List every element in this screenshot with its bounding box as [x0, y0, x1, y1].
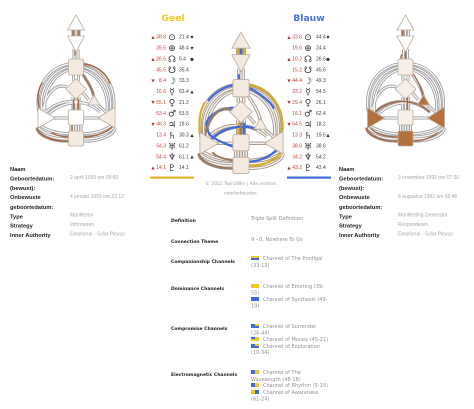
planet table: Blauw: 44.4	[316, 35, 326, 41]
planet table: Geel: ▼	[190, 34, 194, 40]
connection: electromagnetic channels: Channel of Rhythm (5-15)	[263, 383, 328, 389]
planet table: Blauw: ⊙	[304, 33, 312, 43]
profile table: right: Naam	[339, 167, 354, 173]
planet table: Blauw: ♃	[304, 120, 312, 130]
connection: companionship channels: Companionship Channels	[171, 259, 235, 265]
composite centers	[200, 32, 283, 173]
planet table: Blauw: 64.5	[292, 122, 302, 128]
planet table: Geel: ♅	[168, 142, 176, 152]
profile table: left: Inner Authority	[10, 233, 51, 239]
planet table: Geel: 48.4	[179, 46, 189, 52]
planet table: Geel: ☿	[169, 88, 175, 98]
planet table: Blauw: 49.3	[316, 78, 326, 84]
planet table: Blauw: 24.4	[316, 46, 326, 52]
heading: Geel: Geel	[161, 13, 185, 24]
planet table: Geel: ☋	[168, 66, 176, 76]
profile table: left: 4 januari 1993 om 22:12	[70, 194, 124, 200]
planet table: Blauw: ♇	[304, 164, 312, 174]
connection: companionship channels	[171, 256, 323, 269]
planet table: Geel: ☊	[168, 55, 176, 65]
profile table: left: Strategy	[10, 224, 34, 230]
planet table: Blauw: 13.3	[292, 133, 302, 139]
connection: compromise channels: Channel of Surrender	[263, 324, 317, 330]
connection: dominance channels: Dominance Channels	[171, 286, 224, 292]
profile table: left: geboortedatum:	[10, 205, 53, 211]
planet table: Blauw: ▲	[287, 56, 291, 61]
planet table: Geel: ▲	[190, 154, 194, 159]
profile table: left: Emotional - Solar Plexus	[70, 232, 125, 238]
planet table: Geel: ♃	[168, 120, 176, 130]
connection: compromise channels: Compromise Channels	[171, 326, 228, 332]
planet table: Geel: 14.1	[156, 165, 166, 171]
copyright: voorbehouden.	[224, 190, 258, 196]
profile table: left: (bewust):	[10, 186, 35, 192]
connection: dominance channels: 19)	[251, 304, 259, 310]
planet table: Blauw: 29.4	[292, 100, 302, 106]
planet table: Blauw: 18.2	[316, 122, 326, 128]
connection: companionship channels: Channel of The Prodigal	[263, 256, 323, 262]
planet table: Geel: ⊕	[168, 44, 176, 54]
planet table: Geel: ☽	[168, 77, 176, 87]
planet table: Geel: 21.4	[179, 35, 189, 41]
planet table: Geel: ▼	[151, 122, 155, 126]
planet table: Geel: 14.1	[179, 165, 189, 171]
connection: dominance channels: 55)	[251, 290, 259, 296]
connection: compromise channels	[171, 324, 328, 356]
planet table: Blauw: 43.4	[316, 165, 326, 171]
planet table: Blauw: 26.1	[316, 100, 326, 106]
planet table: Blauw: ☿	[305, 88, 311, 98]
planet table: Blauw: 10.2	[292, 56, 302, 62]
planet table: Geel: ▼	[151, 100, 155, 105]
planet table: Geel: 53.5	[179, 111, 189, 117]
profile table: left	[10, 167, 125, 239]
planet table: Geel: ●	[190, 56, 194, 61]
profile table: right: geboortedatum:	[339, 205, 382, 211]
planet table: Blauw: 45.6	[316, 67, 326, 73]
planet table: Geel: 38.8	[156, 35, 166, 41]
connection: dominance channels: Channel of Synthesis (49-	[263, 297, 328, 303]
profile table: left: Naam	[10, 167, 26, 173]
profile table: left: Informeren	[70, 222, 94, 228]
profile table: right: Strategy	[339, 224, 363, 230]
planet table: Geel: ♄	[168, 132, 176, 142]
planet table: Blauw: ☊	[304, 55, 312, 65]
planet table: Blauw: ▼	[287, 100, 291, 105]
profile table: right: Inner Authority	[339, 233, 380, 239]
planet table: Blauw: 54.2	[316, 154, 326, 160]
planet table: Blauw: ♅	[304, 142, 312, 152]
planet table: Blauw: ●	[326, 56, 330, 61]
bodygraph: right person	[366, 15, 444, 146]
planet table: Geel: 21.2	[179, 100, 189, 106]
connection: electromagnetic channels: (61-24)	[251, 396, 269, 402]
composite gold channels	[199, 45, 282, 166]
planet table: Geel: 61.1	[179, 154, 189, 160]
planet table: Geel: ▲	[151, 34, 155, 40]
planet table: Geel: 45.5	[156, 67, 166, 73]
planet table: Blauw: ☋	[304, 66, 312, 76]
planet table: Blauw: 62.4	[316, 111, 326, 117]
left activated channels	[37, 27, 112, 141]
planet table: Blauw: 34.2	[292, 154, 302, 160]
planet table: Geel: ⊙	[168, 33, 176, 43]
planet table: Blauw: 15.2	[292, 67, 302, 73]
profile table: left: Type	[10, 214, 23, 220]
planet table: Blauw: 19.6	[292, 46, 302, 52]
planet table: Blauw: 43.2	[292, 165, 302, 171]
planet table: Geel: 46.3	[156, 122, 166, 128]
profile table: right: Manifesting Generator	[398, 212, 448, 218]
planet table: Geel: ♇	[168, 164, 176, 174]
planet table: Geel: 13.4	[156, 133, 166, 139]
profile table: left: Geboortedatum:	[10, 176, 54, 182]
planet table: Geel: 33.3	[179, 78, 189, 84]
copyright: © 2022 Twin2Win | Alle rechten	[205, 180, 277, 187]
composite brown channels	[199, 109, 241, 168]
planet table: Blauw: ▼	[326, 34, 330, 40]
planet table: Geel: ♆	[168, 153, 176, 163]
planet table: Geel: 54.4	[156, 154, 166, 160]
planet table: Blauw: 44.4	[292, 78, 302, 84]
planet table: Geel: 30.3	[179, 133, 189, 139]
connection: electromagnetic channels: Channel of Awareness	[263, 390, 319, 396]
connection: compromise channels: Channel of Money (45-21)	[263, 337, 328, 343]
connection: electromagnetic channels: Wavelength (48-16)	[251, 377, 301, 383]
planet table: Blauw: 54.5	[316, 89, 326, 95]
planet table: Geel: 53.4	[156, 111, 166, 117]
planet table: Blauw: 38.6	[316, 144, 326, 150]
connection: dominance channels	[171, 284, 328, 310]
planet table: Blauw: ▲	[326, 132, 330, 137]
bodygraph: left person	[37, 15, 115, 146]
planet table: Blauw: ♀	[305, 98, 311, 108]
profile table: right: Geboortedatum:	[339, 176, 383, 182]
planet table: Blauw: ▼	[287, 78, 291, 83]
planet table: Blauw: ♆	[304, 153, 312, 163]
planet table: Geel: ▲	[190, 89, 194, 94]
planet table: Blauw: ▲	[287, 165, 291, 170]
profile table: right: (bewust):	[339, 186, 364, 192]
planet table: Geel: ♂	[168, 110, 176, 120]
planet table: Geel: ▼	[151, 78, 155, 83]
planet table: Geel: 18.6	[179, 122, 189, 128]
connection: electromagnetic channels: Channel of The	[263, 370, 301, 376]
connection: companionship channels: (33-13)	[251, 263, 269, 269]
profile table: right	[339, 167, 459, 239]
connection: definition: Definition	[171, 218, 196, 224]
copyright	[205, 180, 277, 196]
gold underline	[150, 176, 194, 179]
connection: theme: Connection Theme	[171, 239, 218, 245]
profile table: left: 2 april 1993 om 09:50	[70, 175, 119, 181]
profile table: right: Responderen	[398, 222, 428, 228]
planet table: Geel: 61.2	[179, 144, 189, 150]
profile table: left: Onbewuste	[10, 195, 41, 201]
heading: Blauw: Blauw	[293, 13, 325, 24]
connection: electromagnetic channels	[171, 370, 328, 402]
composite blue channels	[207, 45, 276, 162]
planet table: Blauw: ♄	[304, 132, 312, 142]
planet table: Geel: ▲	[151, 56, 155, 61]
planet table: Geel: ▲	[190, 132, 194, 137]
planet table: Blauw: ☽	[304, 77, 312, 87]
planet table: Blauw: 26.6	[316, 56, 326, 62]
connection: definition	[171, 216, 303, 224]
planet table: Geel: 54.3	[156, 144, 166, 150]
planet table: Blauw: ▼	[287, 122, 291, 126]
planet table: Geel: 8.4	[159, 78, 166, 84]
blue underline	[287, 176, 331, 179]
planet table: Geel	[151, 33, 194, 174]
planet table: Geel: 55.1	[156, 100, 166, 106]
planet table: Geel: 63.4	[179, 89, 189, 95]
planet table: Geel: 35.4	[179, 67, 189, 73]
connection: theme	[171, 237, 303, 245]
planet table: Geel: 26.5	[156, 56, 166, 62]
connection: compromise channels: (10-34)	[251, 350, 269, 356]
planet table: Blauw: 16.1	[292, 111, 302, 117]
profile table: right: 5 augustus 1992 om 06:46	[398, 194, 457, 200]
planet table: Geel: 16.6	[156, 89, 166, 95]
planet table: Blauw: ▲	[287, 34, 291, 40]
planet table: Blauw: 19.5	[316, 133, 326, 139]
planet table: Geel: ▲	[151, 165, 155, 170]
connection: theme: 9 - 0, Nowhere To Go	[251, 237, 303, 243]
planet table: Blauw: 33.6	[292, 35, 302, 41]
connection: compromise channels: (26-44)	[251, 330, 269, 336]
right centers	[368, 15, 444, 146]
planet table: Geel: ▼	[190, 45, 194, 50]
planet table: Blauw: ⊕	[304, 44, 312, 54]
connection: definition: Triple Split Definition	[250, 216, 303, 222]
right activated channels	[366, 27, 438, 141]
planet table: Geel: 5.4	[179, 56, 186, 62]
planet table: Blauw	[287, 33, 330, 174]
left centers	[38, 15, 115, 146]
connection: compromise channels: Channel of Exploration	[263, 344, 320, 350]
planet table: Blauw: 33.2	[292, 89, 302, 95]
connection: dominance channels: Channel of Emoting (39-	[263, 284, 324, 290]
planet table: Geel: 39.5	[156, 46, 166, 52]
planet table: Blauw: ♂	[304, 110, 312, 120]
planet table: Blauw: 38.6	[292, 144, 302, 150]
profile table: left: Manifestor	[70, 212, 94, 218]
profile table: right: Onbewuste	[339, 195, 370, 201]
connection: electromagnetic channels: Electromagnetic Channels	[171, 372, 237, 378]
profile table: right: Type	[339, 214, 352, 220]
profile table: right: 3 november 1992 om 07:30	[398, 175, 459, 181]
profile table: right: Emotional - Solar Plexus	[398, 232, 453, 238]
bodygraph: composite chart	[199, 32, 283, 173]
planet table: Geel: ♀	[169, 98, 175, 108]
